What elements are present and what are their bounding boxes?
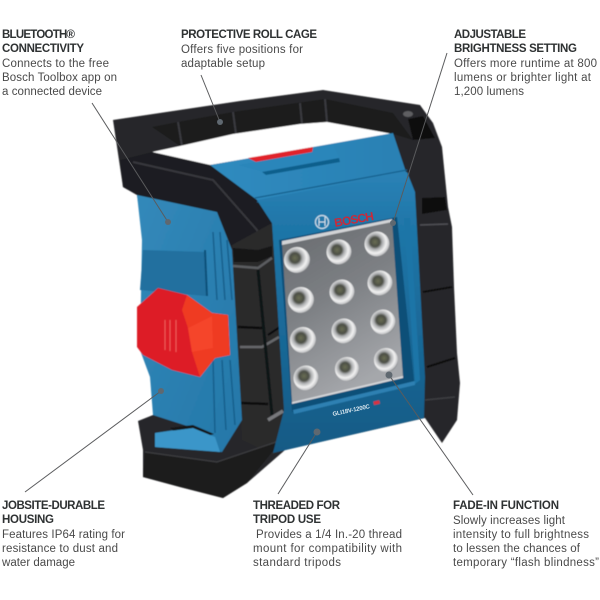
right bumper details bbox=[403, 111, 455, 400]
callout: adjustable brightness: 1,200 lumens bbox=[454, 86, 524, 98]
top grooves bbox=[255, 170, 409, 202]
callout: bluetooth connectivity: CONNECTIVITY bbox=[2, 43, 84, 55]
callout: bluetooth connectivity bbox=[2, 29, 117, 98]
pointer dots bbox=[158, 119, 396, 436]
white opening in handle bbox=[152, 122, 393, 165]
callout: adjustable brightness: BRIGHTNESS SETTING bbox=[454, 43, 577, 55]
pointer lines bbox=[25, 53, 473, 495]
handle inner recess bbox=[152, 99, 413, 146]
callout: threaded for tripod use: standard tripods bbox=[253, 557, 341, 569]
callout: protective roll cage: Offers five positions for bbox=[181, 44, 303, 56]
red rotating knob bbox=[137, 288, 230, 377]
red top button bbox=[238, 145, 340, 175]
callout: adjustable brightness: lumens or brighter light at bbox=[454, 72, 592, 84]
floodlight product illustration bbox=[113, 90, 460, 498]
blue side panel bbox=[137, 195, 242, 452]
callout: fade-in function: FADE-IN FUNCTION bbox=[453, 500, 559, 512]
callout: fade-in function: Slowly increases light bbox=[453, 515, 566, 527]
callout: threaded for tripod use: Provides a 1/4 In.-20 thread bbox=[256, 529, 402, 541]
callout: threaded for tripod use: mount for compatibility with bbox=[253, 543, 402, 555]
callout: fade-in function: to lessen the chances of bbox=[453, 543, 581, 555]
callout: threaded for tripod use: THREADED FOR bbox=[253, 500, 341, 512]
black rubber cage silhouette bbox=[113, 90, 460, 498]
model label: GLI18V-1200C bbox=[332, 404, 371, 418]
callout: jobsite-durable housing: JOBSITE-DURABLE bbox=[2, 500, 105, 512]
callout: jobsite-durable housing: HOUSING bbox=[2, 514, 54, 526]
callout: fade-in function: intensity to full brightness bbox=[453, 529, 589, 541]
top blue face bbox=[210, 133, 415, 223]
LED panel bbox=[279, 217, 420, 414]
model badge accent bbox=[373, 400, 380, 405]
callout: fade-in function: temporary “flash blindness” bbox=[453, 557, 599, 569]
callout: protective roll cage: adaptable setup bbox=[181, 58, 265, 70]
callout: jobsite-durable housing bbox=[1, 500, 125, 569]
callout: jobsite-durable housing: water damage bbox=[1, 557, 75, 569]
callout: bluetooth connectivity: Connects to the free bbox=[2, 58, 109, 70]
left band shading bbox=[120, 152, 272, 250]
callout: adjustable brightness: Offers more runtime at 800 bbox=[454, 58, 597, 70]
callout: protective roll cage: PROTECTIVE ROLL CAGE bbox=[181, 29, 317, 41]
LEDs bbox=[284, 232, 398, 390]
callout: bluetooth connectivity: BLUETOOTH® bbox=[2, 29, 76, 41]
callout: protective roll cage bbox=[181, 29, 317, 70]
front blue housing bbox=[257, 172, 425, 453]
callout: bluetooth connectivity: Bosch Toolbox app on bbox=[2, 72, 117, 84]
callout: fade-in function bbox=[453, 500, 599, 569]
callout: jobsite-durable housing: Features IP64 rating for bbox=[2, 529, 125, 541]
callout: jobsite-durable housing: resistance to dust and bbox=[2, 543, 118, 555]
callout: bluetooth connectivity: a connected device bbox=[2, 86, 102, 98]
callout: threaded for tripod use: TRIPOD USE bbox=[253, 514, 321, 526]
black side column bbox=[232, 223, 285, 455]
bottom foot bbox=[143, 440, 282, 498]
logo circle bbox=[316, 216, 328, 228]
callout: adjustable brightness: ADJUSTABLE bbox=[454, 29, 526, 41]
brand logotype: BOSCH bbox=[333, 209, 375, 230]
callout: adjustable brightness bbox=[454, 29, 597, 98]
callout: threaded for tripod use bbox=[253, 500, 402, 569]
